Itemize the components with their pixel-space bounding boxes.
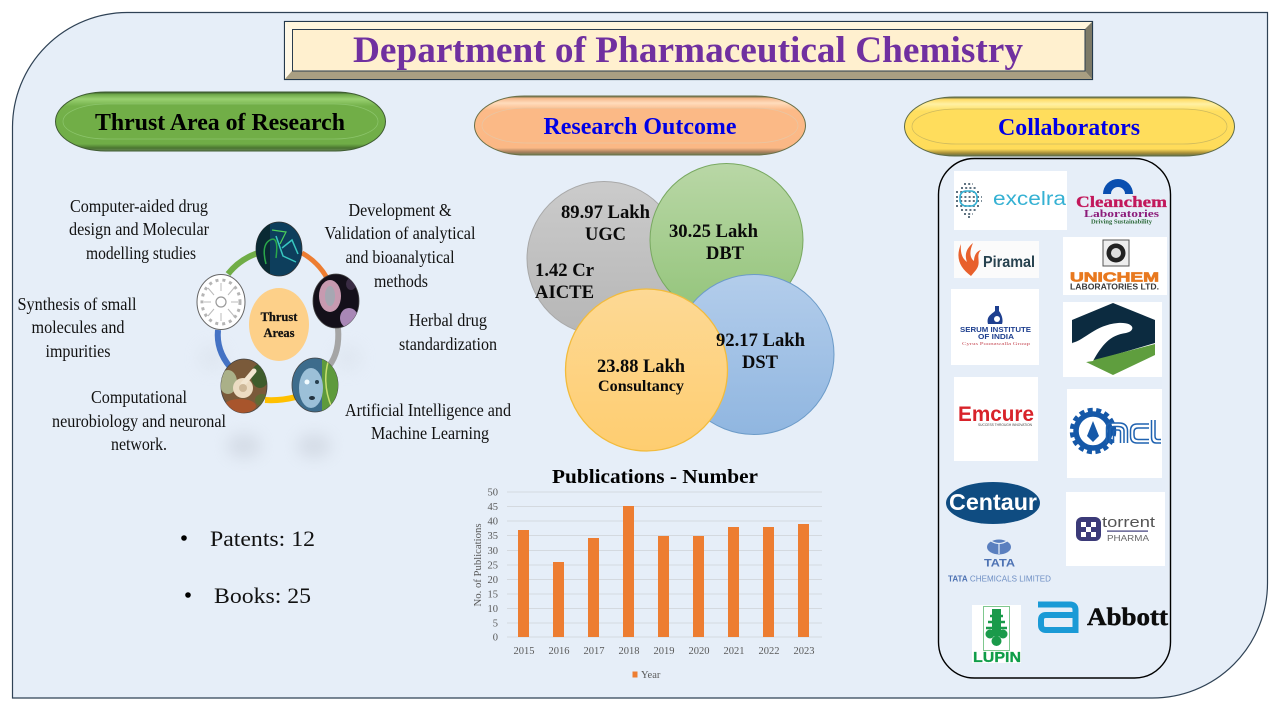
logo: hexagon mark (1063, 302, 1162, 377)
logo: emcure: Emcure (958, 403, 1034, 426)
logo: tata chemicals (948, 540, 1051, 584)
label: AICTE: 1.42 Cr (535, 260, 595, 281)
y axis labels: 30 (488, 546, 498, 557)
title text: Department of Pharmaceutical Chemistry (353, 30, 1023, 71)
x axis labels: 2017 (584, 646, 604, 657)
legend (632, 670, 661, 681)
x axis labels: 2019 (654, 646, 674, 657)
x axis labels: 2018 (618, 646, 640, 657)
x axis labels: 2015 (514, 646, 534, 657)
label: DST: 92.17 Lakh (716, 330, 805, 351)
label: UGC: UGC (585, 224, 626, 245)
logo: centaur: Centaur (949, 489, 1037, 515)
text: herbal drug standardization (399, 310, 497, 354)
logo: abbott: Abbott (1087, 604, 1169, 631)
logo: tata chemicals: TATA (984, 558, 1015, 570)
y axis labels: 40 (488, 516, 498, 528)
logo: excelra (954, 171, 1067, 230)
text: computer-aided drug design: Computer-aided drug (70, 196, 208, 216)
text: synthesis of small molecules: molecules and (32, 317, 124, 337)
logo: cleanchem: Driving Sustainability (1091, 220, 1152, 226)
label: DBT: DBT (706, 243, 744, 264)
logo: abbott (1038, 604, 1169, 631)
logo: torrent pharma (1066, 492, 1165, 566)
logo: tata chemicals: TATA CHEMICALS LIMITED (948, 574, 1051, 584)
center ellipse: Areas (263, 326, 295, 340)
text: artificial intelligence: Machine Learning (371, 423, 489, 443)
logo: piramal (954, 241, 1039, 278)
label: UGC: 89.97 Lakh (561, 202, 650, 223)
label: UGC (561, 202, 650, 245)
logo: lupin (972, 605, 1021, 666)
text: herbal drug standardization: standardization (399, 334, 497, 354)
icon: bioanalytical cells (313, 274, 359, 328)
logo: unichem (1063, 237, 1167, 295)
y axis labels: 20 (488, 575, 498, 586)
text: computational neurobiology (52, 387, 226, 454)
heading text: Collaborators (998, 115, 1140, 141)
y axis labels: 45 (488, 502, 498, 513)
logo: ncl (1067, 389, 1162, 478)
logo: cleanchem (1076, 179, 1167, 226)
label: DST (716, 330, 805, 373)
heading text: Thrust Area of Research (95, 110, 345, 136)
label: DBT (669, 221, 758, 264)
title banner (284, 22, 1092, 80)
label: consultancy: 23.88 Lakh (597, 356, 685, 377)
logo: torrent pharma: torrent (1102, 514, 1156, 531)
thrust areas cycle diagram (197, 222, 362, 458)
x axis labels: 2022 (758, 646, 780, 657)
x axis labels (514, 646, 814, 657)
icon: molecular modelling (256, 222, 302, 276)
text: development and validation: Validation of analytical (324, 223, 476, 243)
text: synthesis of small molecules (18, 294, 136, 361)
label: DBT: 30.25 Lakh (669, 221, 758, 242)
bars (518, 506, 809, 637)
heading text: Research Outcome (544, 114, 737, 140)
logo: piramal: Piramal (983, 254, 1035, 271)
label: consultancy (597, 356, 685, 395)
text: herbal drug standardization: Herbal drug (409, 310, 487, 330)
chart title: Publications - Number (552, 466, 758, 488)
bar chart: publications (473, 466, 822, 681)
text: development and validation: and bioanalytical (346, 247, 454, 267)
y axis labels: 10 (488, 604, 498, 615)
bullet: patents: Patents: 12 (210, 526, 315, 551)
logo: unichem: UNICHEM (1070, 270, 1159, 284)
y axis labels: 5 (493, 618, 498, 630)
x axis labels: 2020 (688, 646, 710, 657)
text: development and validation: Development & (348, 200, 452, 220)
logo: centaur (946, 482, 1040, 524)
text: artificial intelligence: Artificial Intelligence and (345, 400, 511, 420)
venn diagram: funding (527, 164, 834, 451)
icon: herbal mortar (219, 359, 269, 413)
text: computational neurobiology: Computational (91, 387, 187, 407)
y axis labels: 35 (488, 531, 498, 542)
label: AICTE: AICTE (535, 282, 594, 303)
label: DST: DST (742, 352, 778, 373)
bullet: books: Books: 25 (214, 583, 311, 608)
y axis title: No. of Publications (473, 524, 484, 606)
text: computational neurobiology: network. (111, 434, 167, 454)
heading pill: research outcome (474, 96, 806, 155)
logo: serum institute: Cyrus Poonawalla Group (962, 341, 1031, 346)
logo: cleanchem: Laboratories (1084, 209, 1159, 220)
text: artificial intelligence (345, 400, 511, 443)
logo: excelra: excelra (993, 189, 1067, 210)
logo: emcure: SUCCESS THROUGH INNOVATION (978, 423, 1032, 427)
label: AICTE (535, 260, 595, 303)
logo: serum institute: SERUM INSTITUTE (960, 325, 1031, 334)
text: computer-aided drug design: modelling studies (86, 243, 196, 263)
text: synthesis of small molecules: Synthesis of small (18, 294, 136, 314)
y axis labels: 25 (488, 560, 498, 572)
x axis labels: 2023 (794, 646, 814, 657)
x axis labels: 2021 (724, 646, 744, 657)
x axis labels: 2016 (548, 646, 570, 657)
icon: AI face (292, 356, 340, 414)
logo: cleanchem: Cleanchem (1076, 194, 1167, 211)
heading pill: thrust area (56, 92, 386, 151)
logo: serum institute: OF INDIA (978, 332, 1015, 341)
y axis labels (488, 488, 498, 644)
text: computer-aided drug design: design and Molecular (69, 219, 209, 239)
legend: Year (641, 670, 661, 681)
center ellipse: Thrust (261, 310, 298, 324)
text: synthesis of small molecules: impurities (46, 341, 110, 361)
icon: molecule wheel (197, 274, 245, 330)
text: computer-aided drug design (69, 196, 209, 263)
label: consultancy: Consultancy (598, 378, 684, 395)
logo: emcure (954, 377, 1038, 461)
logo: lupin: LUPIN (973, 650, 1021, 666)
logo: torrent pharma: PHARMA (1107, 534, 1150, 543)
logo: serum institute (951, 289, 1039, 365)
logo: unichem: LABORATORIES LTD. (1070, 282, 1159, 292)
y axis labels: 50 (488, 488, 498, 498)
heading pill: collaborators (904, 97, 1234, 156)
y axis labels: 0 (493, 632, 498, 644)
y axis labels: 15 (488, 590, 498, 600)
text: computational neurobiology: neurobiology and neuronal (52, 411, 226, 431)
panel: collaborators logos (938, 158, 1170, 678)
center ellipse (249, 288, 309, 361)
text: development and validation: methods (374, 271, 428, 291)
text: development and validation (324, 200, 476, 291)
